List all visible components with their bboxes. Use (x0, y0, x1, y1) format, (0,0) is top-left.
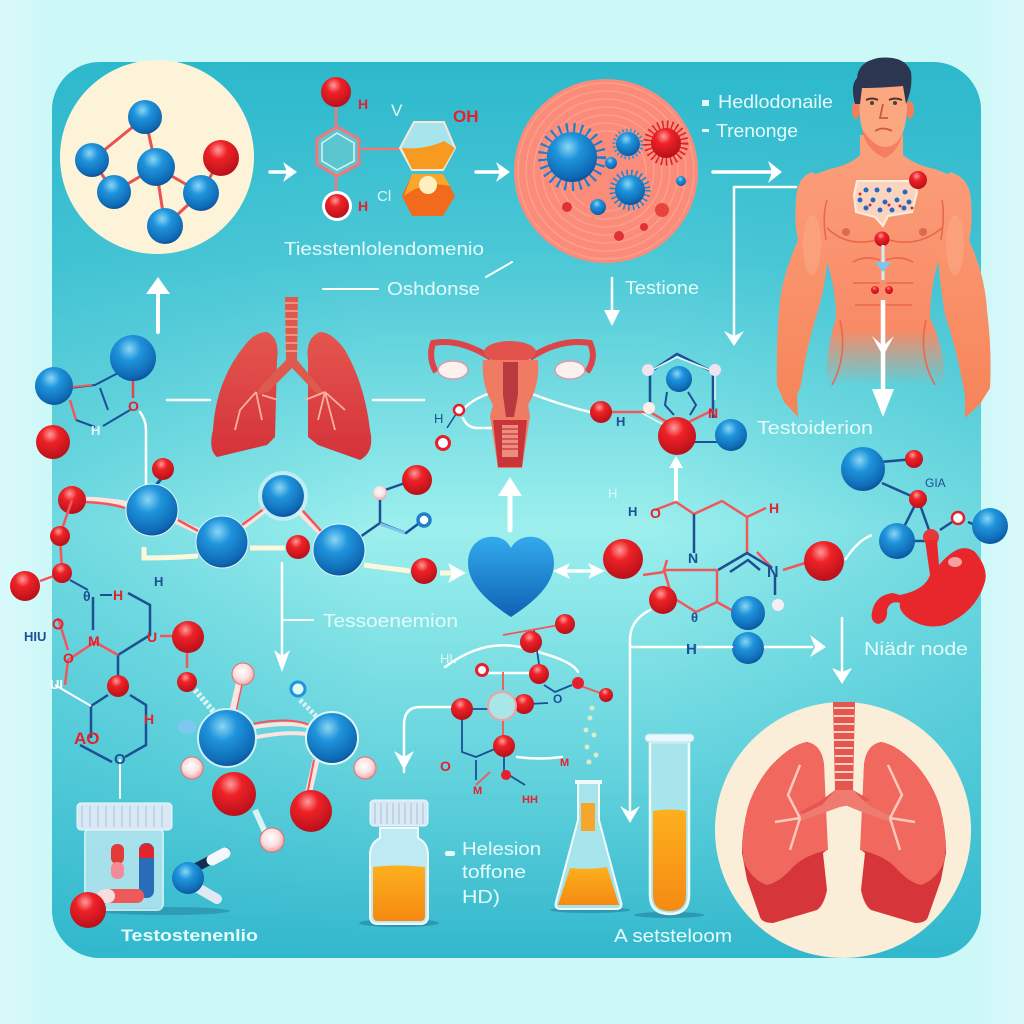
label: Testostenenlio: Testostenenlio (121, 926, 258, 945)
label: Testoiderion: Testoiderion (757, 418, 873, 438)
molecule: left ring structure: H (144, 711, 154, 727)
illustration: man with chest inset (777, 58, 991, 418)
text: Helesion toffone HD) (445, 839, 541, 907)
panel: hexagon chemical structure: V (391, 101, 403, 120)
bullet list: Hedlodonaile, Trenonge: Trenonge (716, 121, 798, 141)
molecule: left ring structure: HIU (24, 629, 46, 644)
icon: blue heart (468, 537, 554, 617)
molecule: lower center: O (440, 758, 451, 774)
molecule: upper left cluster: O (128, 398, 139, 414)
lines beside lungs (167, 399, 424, 401)
molecule: lower center (440, 614, 613, 806)
arrow: down toward lower lungs with label Niädr node (832, 618, 968, 684)
text: Helesion toffone HD): HD) (462, 887, 500, 907)
right arm highlight (946, 215, 964, 275)
arrows: to body (713, 161, 796, 346)
molecule: left ring structure: O (114, 751, 126, 768)
molecule: right side cluster: GIA (925, 476, 946, 490)
arrow: double between heart and molecule (553, 563, 605, 579)
molecule: center right ring: H (628, 504, 637, 519)
molecule: center right ring: θ (691, 610, 698, 625)
icon: small molecule by jar (172, 852, 226, 899)
molecule: left ring structure (10, 500, 204, 798)
right lobe (860, 742, 946, 923)
label: Oshdonse: Oshdonse (387, 279, 480, 299)
label: Tiesstenlolendomenio: Tiesstenlolendomenio (284, 239, 484, 259)
panel: hexagon chemical structure: Cl (377, 188, 391, 205)
arrow: down with label Tessoenemion: Tessoenemion (323, 611, 458, 631)
arrows: branch to flask and lungs (620, 610, 826, 823)
molecule: center right ring (603, 456, 844, 664)
arrow on body (882, 245, 884, 280)
arrow: structure to cell circle (476, 162, 510, 182)
molecule: right side cluster (841, 447, 1008, 560)
label: Testione with arrow: Testione (625, 278, 699, 298)
molecule: lower center: M (560, 757, 569, 769)
left lobe (742, 742, 828, 923)
molecule: center right ring: N (767, 564, 779, 581)
panel: hexagon chemical structure: H (358, 96, 368, 112)
molecule: left ring structure: AO (74, 729, 100, 748)
neck shadow (862, 130, 903, 158)
molecule: lower center: HH (522, 794, 538, 806)
panel: hexagon chemical structure: OH (453, 107, 478, 126)
icon: conical flask (550, 780, 630, 913)
molecule: lower center: HL (440, 651, 457, 666)
illustration: uterus (431, 341, 593, 468)
molecule: lower center: M (473, 785, 482, 797)
arrow: chain flow to heart (144, 547, 466, 583)
molecule: upper right of center: H (616, 414, 625, 429)
icon: red ball by jar (70, 892, 106, 928)
torso (813, 135, 950, 385)
bullet list: Hedlodonaile, Trenonge (702, 92, 833, 141)
panel: hexagon chemical structure: H (358, 198, 368, 214)
panel: pink circle with pathogens (514, 79, 698, 263)
molecule: center right ring: O (650, 505, 661, 521)
illustration: uterus: H (434, 411, 443, 426)
chest inset (854, 181, 917, 226)
text: Helesion toffone HD): toffone (462, 862, 526, 882)
molecule chain: central left flow (58, 458, 437, 584)
molecule: large blue and red (177, 663, 376, 852)
right arm (930, 172, 991, 418)
icon: pill jar (77, 803, 230, 915)
label: A setsteloom: A setsteloom (614, 926, 732, 946)
arrow: heart up to uterus (498, 477, 522, 530)
main teal panel (52, 62, 981, 958)
trachea and bronchi (800, 702, 870, 815)
icon: test tube (634, 734, 704, 918)
molecule: left ring structure: M (88, 633, 100, 649)
left arm (777, 172, 835, 417)
head with ears (852, 101, 860, 119)
muscle definition (824, 200, 943, 385)
icon: orange vial (359, 800, 439, 927)
molecule: upper left cluster (35, 335, 156, 485)
molecule: upper right of center (590, 354, 747, 455)
panel: hexagon chemical structure (317, 77, 478, 221)
molecule: lower center: O (553, 692, 562, 706)
arrow: circle to structure (270, 162, 297, 182)
label: Testione with arrow (604, 278, 699, 326)
molecule: left ring structure: UI (50, 677, 63, 692)
bullet list: Hedlodonaile, Trenonge: Hedlodonaile (718, 92, 833, 112)
arrow: down toward lower lungs with label Niädr node: Niädr node (864, 639, 968, 659)
arrows: branch to flask and lungs: H (686, 641, 697, 658)
molecule: left ring structure: H (113, 587, 123, 603)
panel: molecule in cream circle (60, 60, 254, 254)
molecule: center right ring: H (769, 500, 779, 516)
label: Oshdonse (323, 262, 512, 299)
arrow: lower center down to vial (394, 707, 450, 772)
molecule: left ring structure: U (147, 629, 157, 645)
illustration: stomach (872, 529, 986, 626)
illustration: upper lungs (211, 297, 371, 460)
left arm highlight (803, 215, 821, 275)
molecule: center right ring: H (608, 486, 617, 501)
panel: lower lungs in cream circle (715, 702, 971, 958)
arrow: up to cream circle (146, 277, 170, 332)
molecule: upper right of center: N (708, 405, 718, 421)
text: Helesion toffone HD): Helesion (462, 839, 541, 859)
molecule: left ring structure: H (154, 574, 163, 589)
molecule: center right ring: N (688, 550, 698, 566)
molecule: upper left cluster: H (91, 423, 100, 438)
molecule: left ring structure: O (63, 650, 74, 666)
arrow: down with label Tessoenemion (274, 563, 458, 672)
molecule: left ring structure: θ (83, 588, 91, 604)
